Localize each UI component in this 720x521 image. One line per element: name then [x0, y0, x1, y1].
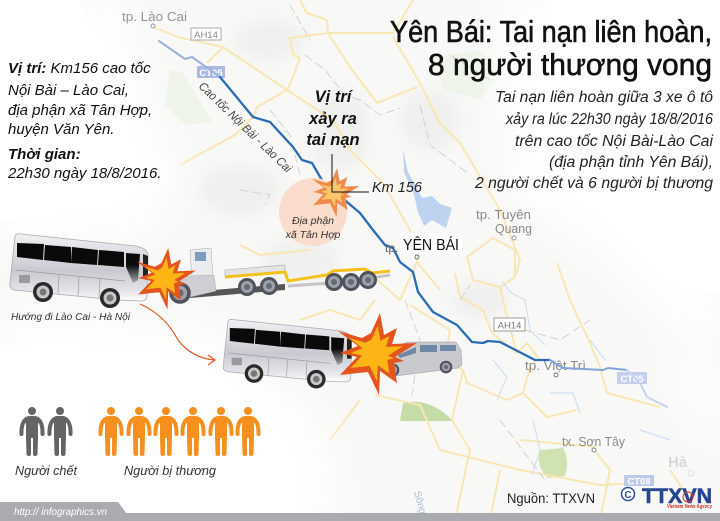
logo: TTXVN: Vietnam News Agency: [667, 504, 712, 510]
icon: crash location star inner: [320, 178, 349, 207]
area circle: Địa phận xã Tân Hợp: Địa phận: [292, 215, 334, 227]
road badges: CT08: [627, 476, 651, 488]
bus 1: [10, 234, 148, 308]
legend: dead: Người chết: [15, 463, 78, 478]
summary text: (địa phận tỉnh Yên Bái),: [549, 154, 713, 171]
logo: TTXVN: TTXVN: [642, 485, 712, 508]
place labels: Quang: [495, 221, 532, 236]
title: 8 người thương vong: [428, 47, 712, 82]
area circle: Địa phận xã Tân Hợp: xã Tân Hợp: [285, 229, 341, 241]
heading: Vị trí xảy ra tai nạn: xảy ra: [308, 110, 357, 128]
icons: dead: [21, 407, 71, 456]
road badges: [191, 28, 654, 488]
location and time text: Nội Bài – Lào Cai,: [8, 82, 129, 99]
legend: injured: Người bị thương: [124, 463, 217, 478]
logo: TTXVN: [622, 485, 712, 510]
location and time text: địa phận xã Tân Hợp,: [8, 102, 152, 119]
road badges: AH14: [498, 320, 521, 332]
lake: [403, 150, 452, 228]
summary text: [474, 89, 714, 192]
label: tp. Yên Bái: [385, 233, 462, 255]
place labels: tp. Lào Cai: [122, 9, 187, 24]
location and time text: Thời gian:: [8, 146, 81, 163]
heading: Vị trí xảy ra tai nạn: Vị trí: [315, 88, 354, 106]
label: Km 156: Km 156: [372, 180, 423, 196]
road badges: AH14: [194, 30, 218, 41]
summary text: trên cao tốc Nội Bài-Lào Cai: [515, 133, 714, 150]
label: Cao tốc Nội Bài - Lào Cai: Cao tốc Nội Bài - Lào Cai: [196, 79, 295, 176]
pickup: [387, 342, 462, 376]
place labels: Sông: [411, 490, 428, 515]
footer bar: [0, 502, 720, 521]
source: Nguồn: TTXVN: [507, 490, 595, 506]
title: [390, 14, 712, 82]
area circle: Địa phận xã Tân Hợp: [279, 178, 347, 246]
place labels: tp. Việt Trì: [525, 358, 586, 373]
heading: Vị trí xảy ra tai nạn: [306, 88, 360, 149]
logo: TTXVN: C: [624, 490, 632, 501]
road badges: CT05: [620, 374, 644, 385]
explosion 1: [137, 248, 196, 310]
caption: direction: Hướng đi Lào Cai - Hà Nội: [11, 311, 131, 323]
place labels: tp. Tuyên: [476, 207, 531, 222]
explosion 2: [338, 313, 417, 395]
bus 2: [223, 319, 352, 388]
location and time text: [7, 60, 161, 182]
leader line: [332, 154, 369, 192]
roads: [153, 0, 690, 520]
location and time text: 22h30 ngày 18/8/2016.: [7, 165, 161, 182]
label: tp. Yên Bái: tp.: [385, 241, 398, 255]
place labels: [122, 9, 694, 515]
location and time text: huyện Văn Yên.: [8, 121, 114, 138]
icons: injured: [100, 407, 259, 456]
footer bar: http:// infographics.vn: [14, 506, 107, 518]
label: tp. Yên Bái: YÊN BÁI: [403, 237, 459, 254]
place labels: Hà: [668, 454, 688, 471]
place labels: tx. Sơn Tây: [562, 434, 625, 449]
route: expressway: [159, 41, 667, 407]
green areas: [164, 50, 567, 478]
summary text: Tai nạn liên hoàn giữa 3 xe ô tô: [495, 89, 713, 106]
summary text: 2 người chết và 6 người bị thương: [474, 175, 713, 192]
truck with trailer: [169, 248, 390, 304]
road badges: CT05: [199, 68, 223, 79]
heading: Vị trí xảy ra tai nạn: tai nạn: [306, 131, 360, 149]
arrow: [140, 304, 215, 365]
icon: crash location star: [312, 168, 359, 217]
location and time text: Vị trí: Km156 cao tốc: [8, 60, 151, 77]
